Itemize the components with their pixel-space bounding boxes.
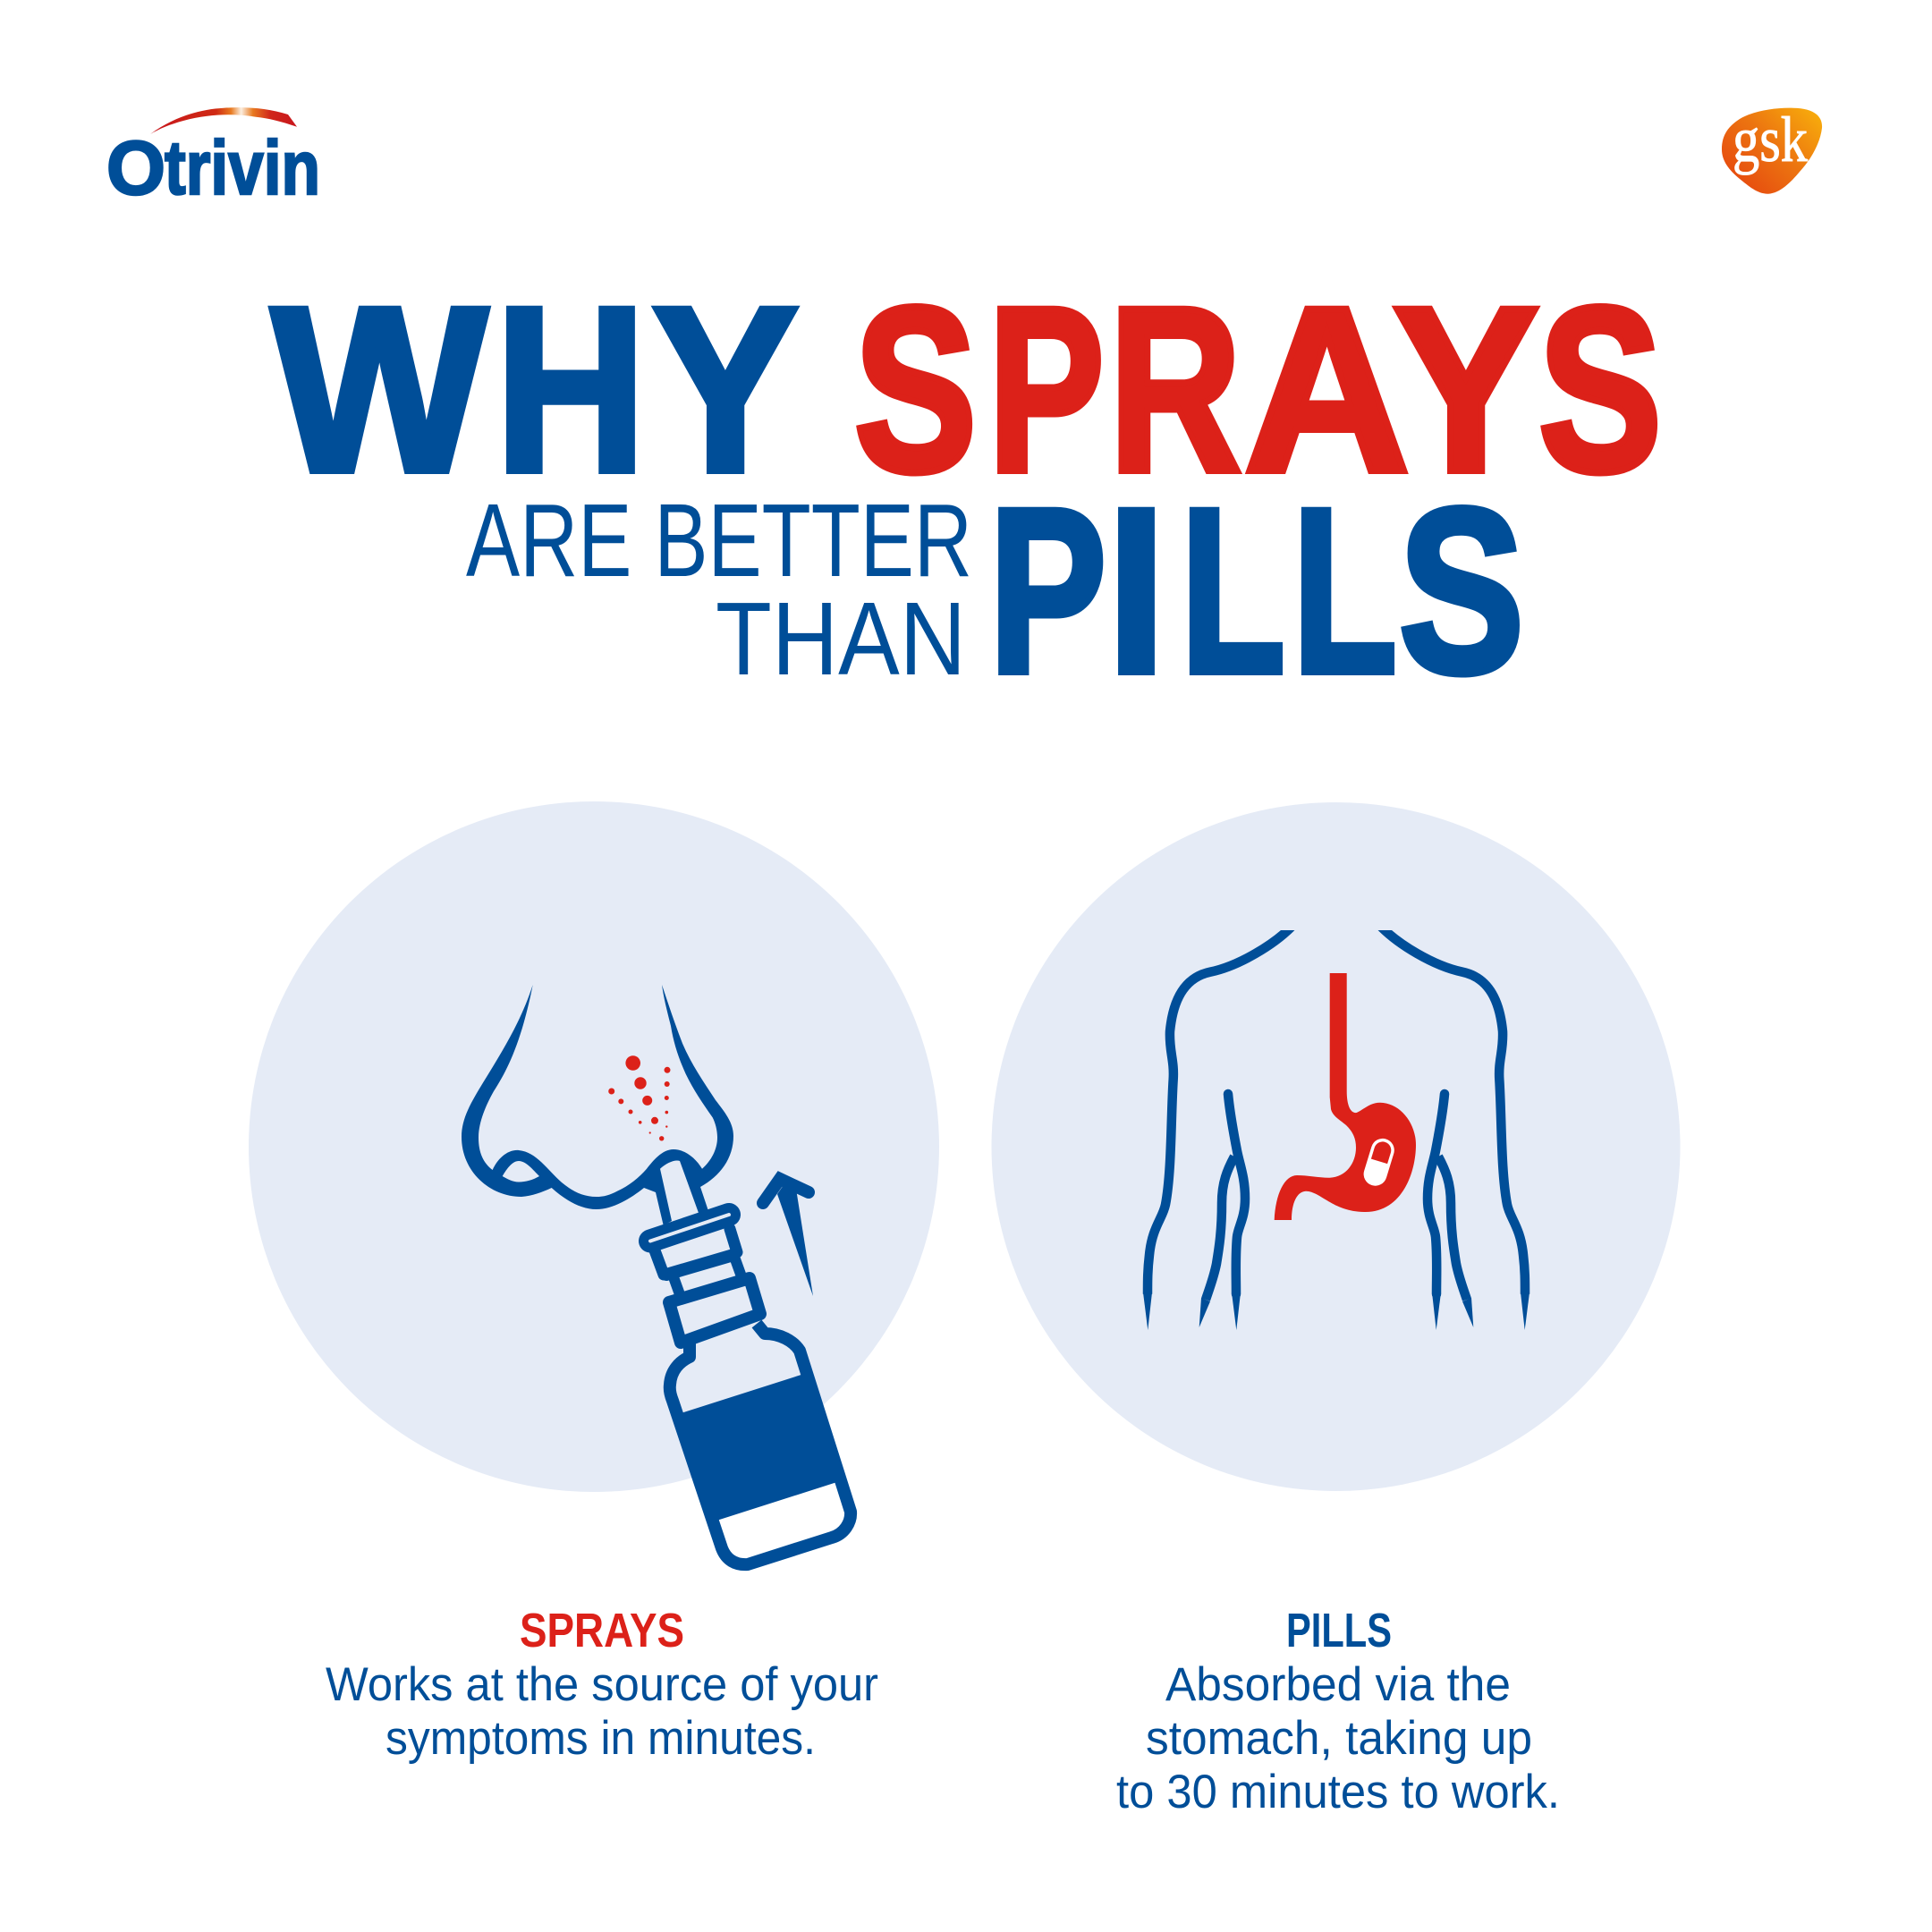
left nostril opening bbox=[503, 1161, 539, 1182]
body line 2: stomach, taking up bbox=[1146, 1712, 1532, 1765]
icon: nasal spray bottle bbox=[650, 1215, 852, 1565]
logo wordmark: O bbox=[106, 126, 165, 211]
bottle body outline bbox=[670, 1324, 851, 1564]
body line 3: to 30 minutes to work. bbox=[1116, 1766, 1560, 1818]
icon: nose with nozzle tip bbox=[462, 985, 733, 1225]
nose outline bbox=[462, 985, 733, 1225]
logo swoosh bbox=[150, 107, 297, 134]
GSK orange shape bbox=[1722, 108, 1822, 194]
text block: pills bbox=[1116, 1604, 1560, 1818]
GSK logo bbox=[1722, 104, 1822, 194]
body line 1: Absorbed via the bbox=[1165, 1658, 1511, 1711]
text block: sprays bbox=[326, 1604, 878, 1765]
title word: SPRAYS: S bbox=[854, 258, 977, 521]
heading: SPRAYS: SPRAYS bbox=[520, 1604, 684, 1657]
title word: SPRAYS: P bbox=[988, 258, 1105, 521]
title word: WHY: W bbox=[272, 258, 489, 521]
title words: ARE BETTER: ARE BETTER bbox=[466, 482, 972, 598]
title word: SPRAYS: Y bbox=[1394, 258, 1538, 521]
title word: PILLS: S bbox=[1399, 460, 1524, 722]
torso right side bbox=[1379, 925, 1530, 1330]
title word: WHY: H bbox=[496, 258, 646, 521]
GSK wordmark: gsk bbox=[1733, 104, 1808, 175]
stomach and esophagus bbox=[1275, 973, 1416, 1220]
spray collar bbox=[650, 1215, 760, 1343]
heading: PILLS: PILLS bbox=[1286, 1604, 1392, 1657]
capsule bbox=[1360, 1136, 1397, 1189]
icon: torso outline bbox=[1143, 925, 1530, 1330]
title word: PILLS: L bbox=[1292, 460, 1397, 722]
title word: SPRAYS: A bbox=[1244, 258, 1410, 521]
title word: PILLS: P bbox=[989, 460, 1106, 722]
bottle label band bbox=[675, 1373, 843, 1522]
body line 1: Works at the source of your bbox=[326, 1658, 878, 1711]
title word: PILLS: I bbox=[1107, 460, 1165, 722]
title word: WHY: Y bbox=[653, 258, 798, 521]
icon: spray droplets bbox=[608, 1055, 671, 1141]
title word: SPRAYS: S bbox=[1538, 258, 1662, 521]
panel: pills circle bbox=[991, 802, 1680, 1491]
torso left side bbox=[1143, 925, 1293, 1330]
Otrivin logo bbox=[106, 107, 320, 211]
panel: sprays circle bbox=[249, 801, 939, 1492]
icon: upward arrow bbox=[763, 1179, 813, 1296]
body line 2: symptoms in minutes. bbox=[386, 1712, 816, 1765]
title bbox=[272, 258, 1662, 722]
title word: THAN: THAN bbox=[716, 580, 966, 697]
icon: stomach with capsule bbox=[1275, 973, 1416, 1220]
logo wordmark: trivin bbox=[165, 126, 320, 211]
bottle lower white fill bbox=[711, 1476, 852, 1565]
title word: PILLS: L bbox=[1181, 460, 1285, 722]
title word: SPRAYS: R bbox=[1109, 258, 1241, 521]
